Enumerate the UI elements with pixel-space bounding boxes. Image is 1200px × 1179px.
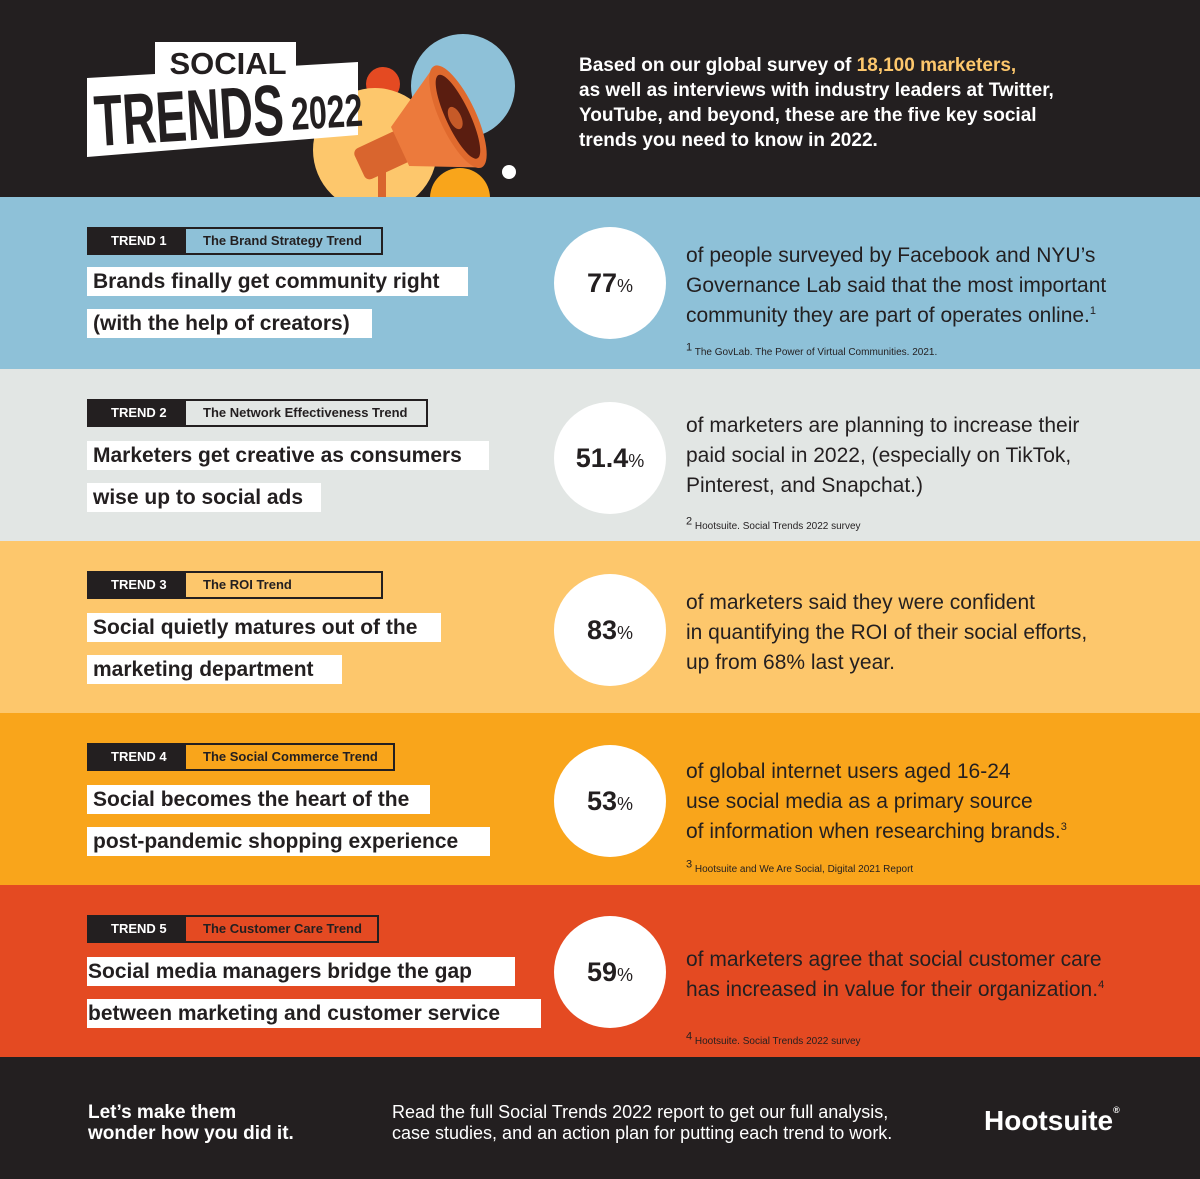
intro text: Based on our global survey of 18,100 marketers, bbox=[579, 55, 1016, 76]
intro text: as well as interviews with industry leaders at Twitter, bbox=[579, 80, 1054, 101]
stat circle: 51.4% bbox=[576, 443, 644, 473]
trend tag: The ROI Trend bbox=[203, 577, 292, 592]
trend tag bbox=[87, 915, 379, 943]
trend tag: TREND 2 bbox=[111, 405, 167, 420]
stat text: in quantifying the ROI of their social efforts, bbox=[686, 621, 1087, 644]
stat text bbox=[686, 760, 1067, 843]
panel: trend 1 bbox=[0, 197, 1200, 369]
footnote: 3 Hootsuite and We Are Social, Digital 2021 Report bbox=[686, 859, 913, 875]
stat text: Pinterest, and Snapchat.) bbox=[686, 474, 923, 497]
intro text: YouTube, and beyond, these are the five key social bbox=[579, 105, 1037, 126]
footnote: 4 Hootsuite. Social Trends 2022 survey bbox=[686, 1031, 861, 1047]
footer call to action bbox=[392, 1102, 892, 1143]
header graphic: title and megaphone: TRENDS bbox=[92, 69, 286, 161]
stat circle: 77% bbox=[587, 268, 633, 298]
stat circle bbox=[554, 574, 666, 686]
panel: trend 3: marketing department bbox=[93, 658, 314, 681]
trend tag bbox=[87, 571, 383, 599]
footer tagline bbox=[88, 1102, 294, 1144]
stat text: community they are part of operates online.1 bbox=[686, 304, 1096, 327]
stat text bbox=[686, 244, 1106, 327]
panel: trend 2 bbox=[0, 369, 1200, 541]
panel: trend 1: (with the help of creators) bbox=[93, 312, 350, 335]
panel: trend 4 bbox=[0, 713, 1200, 885]
stat circle bbox=[554, 227, 666, 339]
stat circle bbox=[554, 916, 666, 1028]
stat text: has increased in value for their organization.4 bbox=[686, 978, 1104, 1001]
footer bbox=[0, 1057, 1200, 1179]
stat text bbox=[686, 414, 1080, 497]
panel: trend 4: post-pandemic shopping experience bbox=[93, 830, 458, 853]
header graphic: title and megaphone: 2022 bbox=[290, 85, 364, 140]
trend tag: The Brand Strategy Trend bbox=[203, 233, 362, 248]
headline: Social media managers bridge the gap bbox=[88, 960, 472, 983]
stat text bbox=[686, 591, 1087, 674]
trend tag: The Social Commerce Trend bbox=[203, 749, 378, 764]
footer call to action: Read the full Social Trends 2022 report to get our full analysis, bbox=[392, 1102, 888, 1122]
headline: Marketers get creative as consumers bbox=[93, 444, 462, 467]
stat text: of marketers agree that social customer care bbox=[686, 948, 1102, 971]
intro text bbox=[579, 55, 1054, 151]
stat text: paid social in 2022, (especially on TikTok, bbox=[686, 444, 1071, 467]
header bbox=[0, 0, 1200, 197]
stat text: use social media as a primary source bbox=[686, 790, 1033, 813]
stat text: of global internet users aged 16-24 bbox=[686, 760, 1011, 783]
footer call to action: case studies, and an action plan for putting each trend to work. bbox=[392, 1123, 892, 1143]
footnote: 2 Hootsuite. Social Trends 2022 survey bbox=[686, 516, 861, 532]
stat circle: 53% bbox=[587, 786, 633, 816]
stat text: of information when researching brands.3 bbox=[686, 820, 1067, 843]
headline: Social quietly matures out of the bbox=[93, 616, 417, 639]
trend tag bbox=[87, 399, 428, 427]
stat circle bbox=[554, 745, 666, 857]
panel: trend 2: wise up to social ads bbox=[93, 486, 303, 509]
trend tag: The Customer Care Trend bbox=[203, 921, 362, 936]
trend tag bbox=[87, 743, 395, 771]
stat text: of people surveyed by Facebook and NYU’s bbox=[686, 244, 1095, 267]
intro text: trends you need to know in 2022. bbox=[579, 130, 878, 151]
header graphic: title and megaphone bbox=[87, 34, 516, 197]
panel: trend 5 bbox=[0, 885, 1200, 1057]
footer tagline: wonder how you did it. bbox=[88, 1123, 294, 1144]
logo: Hootsuite: Hootsuite® bbox=[984, 1105, 1120, 1136]
stat text: Governance Lab said that the most important bbox=[686, 274, 1106, 297]
trend tag: The Network Effectiveness Trend bbox=[203, 405, 407, 420]
stat text: of marketers are planning to increase their bbox=[686, 414, 1079, 437]
trend tag: TREND 3 bbox=[111, 577, 167, 592]
stat circle: 59% bbox=[587, 957, 633, 987]
trend tag: TREND 5 bbox=[111, 921, 167, 936]
stat text: of marketers said they were confident bbox=[686, 591, 1035, 614]
trend tag: TREND 1 bbox=[111, 233, 167, 248]
stat circle: 83% bbox=[587, 615, 633, 645]
footnote: 1 The GovLab. The Power of Virtual Communities. 2021. bbox=[686, 342, 937, 358]
trend tag: TREND 4 bbox=[111, 749, 167, 764]
header graphic: title and megaphone: SOCIAL bbox=[169, 46, 287, 81]
panel: trend 5: between marketing and customer service bbox=[88, 1002, 500, 1025]
stat text: up from 68% last year. bbox=[686, 651, 895, 674]
trend tag bbox=[87, 227, 383, 255]
headline: Brands finally get community right bbox=[93, 270, 440, 293]
stat circle bbox=[554, 402, 666, 514]
stat text bbox=[686, 948, 1104, 1001]
headline: Social becomes the heart of the bbox=[93, 788, 409, 811]
footer tagline: Let’s make them bbox=[88, 1102, 236, 1123]
panel: trend 3 bbox=[0, 541, 1200, 713]
